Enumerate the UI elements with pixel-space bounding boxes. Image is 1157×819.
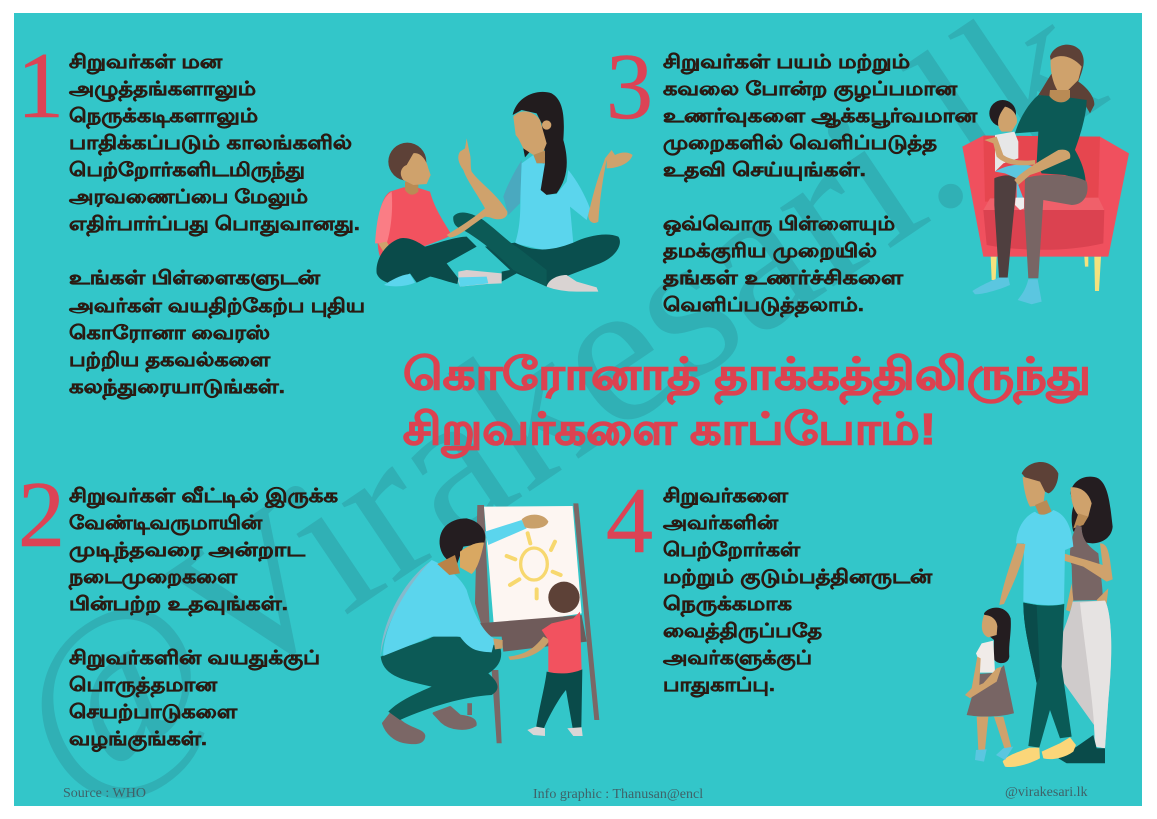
text: block 4 body: அவர்களுக்குப் [663, 648, 812, 671]
text: block 2 first paragraph [68, 486, 338, 617]
block 3 [606, 35, 978, 318]
number 3: 3 [606, 35, 653, 139]
illustration: mother and son sitting [375, 92, 633, 292]
text: block 4 body [663, 486, 933, 698]
text: block 1 first paragraph [69, 52, 360, 237]
text: block 1 first paragraph: பாதிக்கப்படும் காலங்களில் [69, 133, 352, 156]
text: block 2 first paragraph: நடைமுறைகளை [68, 567, 238, 590]
text: block 1 second paragraph: பற்றிய தகவல்களை [69, 350, 271, 373]
shoes [384, 270, 598, 292]
text: block 3 first paragraph: சிறுவர்கள் பயம் மற்றும் [663, 52, 910, 75]
illustration: father and child painting at easel [381, 503, 599, 743]
armchair [962, 136, 1129, 291]
title [403, 350, 1091, 459]
text: block 1 first paragraph: அழுத்தங்களாலும் [69, 79, 256, 102]
boy [375, 143, 477, 284]
block 4 [606, 469, 933, 698]
text: block 4 body: அவர்களின் [663, 513, 779, 534]
text: block 3 first paragraph: முறைகளில் வெளிப்படுத்த [663, 133, 937, 156]
text: block 2 second paragraph: வழங்குங்கள். [69, 729, 207, 752]
block 1 [17, 34, 365, 400]
text: block 1 first paragraph: பெற்றோர்களிடமிருந்து [69, 160, 305, 183]
text: block 3 second paragraph: தங்கள் உணர்ச்சிகளை [663, 268, 904, 291]
child [508, 582, 583, 736]
text: block 1 second paragraph: உங்கள் பிள்ளைகளுடன் [69, 268, 321, 291]
girl [965, 608, 1014, 762]
mother right arm [588, 150, 633, 223]
footer: credit: Info graphic : Thanusan@encl [533, 787, 703, 802]
block 2 [18, 463, 338, 752]
man [381, 515, 548, 743]
text: block 4 body: சிறுவர்களை [663, 486, 789, 509]
text: block 4 body: பாதுகாப்பு. [663, 675, 775, 698]
illustration: mother and child on red armchair [962, 45, 1129, 304]
text: block 2 first paragraph: சிறுவர்கள் வீட்டில் இருக்க [69, 486, 338, 509]
mother left arm [447, 138, 507, 238]
sun drawing [507, 533, 561, 598]
text: block 1 first paragraph: எதிர்பார்ப்பது பொதுவானது. [69, 214, 360, 237]
number 4: 4 [606, 469, 653, 573]
text: block 2 second paragraph: சிறுவர்களின் வயதுக்குப் [69, 648, 320, 671]
text: block 3 second paragraph [663, 214, 904, 318]
text: block 2 first paragraph: பின்பற்ற உதவுங்கள். [69, 594, 288, 617]
text: block 4 body: நெருக்கமாக [663, 594, 792, 617]
child [984, 100, 1035, 210]
text: block 2 first paragraph: வேண்டிவருமாயின் [69, 513, 263, 536]
illustration: family standing [965, 462, 1113, 767]
text: block 1 first paragraph: நெருக்கடிகளாலும் [69, 106, 258, 129]
text: block 4 body: பெற்றோர்கள் [663, 540, 801, 561]
text: block 1 first paragraph: சிறுவர்கள் மன [69, 52, 223, 75]
woman [994, 45, 1094, 278]
number 2: 2 [18, 463, 65, 567]
text: block 2 second paragraph: செயற்பாடுகளை [69, 702, 238, 723]
text: block 3 second paragraph: ஒவ்வொரு பிள்ளையும் [663, 214, 895, 237]
woman [1053, 477, 1113, 763]
text: block 4 body: வைத்திருப்பதே [663, 621, 822, 644]
footer: source: Source : WHO [63, 786, 146, 801]
text: block 2 second paragraph [69, 648, 320, 752]
text: block 3 second paragraph: வெளிப்படுத்தலாம். [663, 295, 864, 318]
text: block 4 body: மற்றும் குடும்பத்தினருடன் [663, 567, 933, 590]
text: block 3 first paragraph [663, 52, 978, 183]
mother legs [485, 234, 620, 287]
woman front leg, arm and shoes [972, 150, 1088, 304]
text: block 3 first paragraph: உதவி செய்யுங்கள். [663, 160, 866, 183]
text: block 1 second paragraph: கலந்துரையாடுங்கள். [69, 377, 285, 400]
title: சிறுவர்களை காப்போம்! [403, 405, 936, 459]
man [999, 462, 1076, 767]
text: block 1 second paragraph [69, 268, 365, 400]
mother [453, 92, 633, 287]
number 1: 1 [17, 34, 64, 138]
text: block 2 second paragraph: பொருத்தமான [69, 675, 218, 698]
text: block 1 second paragraph: கொரோனா வைரஸ் [69, 323, 270, 344]
text: block 3 first paragraph: உணர்வுகளை ஆக்கபூர்வமான [663, 106, 978, 129]
title: கொரோனாத் தாக்கத்திலிருந்து [403, 350, 1091, 405]
text: block 3 first paragraph: கவலை போன்ற குழப்பமான [663, 79, 958, 102]
text: block 2 first paragraph: முடிந்தவரை அன்றாட [69, 540, 306, 563]
text: block 1 second paragraph: அவர்கள் வயதிற்கேற்ப புதிய [69, 296, 365, 319]
text: block 3 second paragraph: தமக்குரிய முறையில் [663, 241, 877, 264]
footer: handle: @virakesari.lk [1005, 785, 1087, 800]
text: block 1 first paragraph: அரவணைப்பை மேலும் [69, 187, 308, 210]
easel [467, 503, 599, 743]
